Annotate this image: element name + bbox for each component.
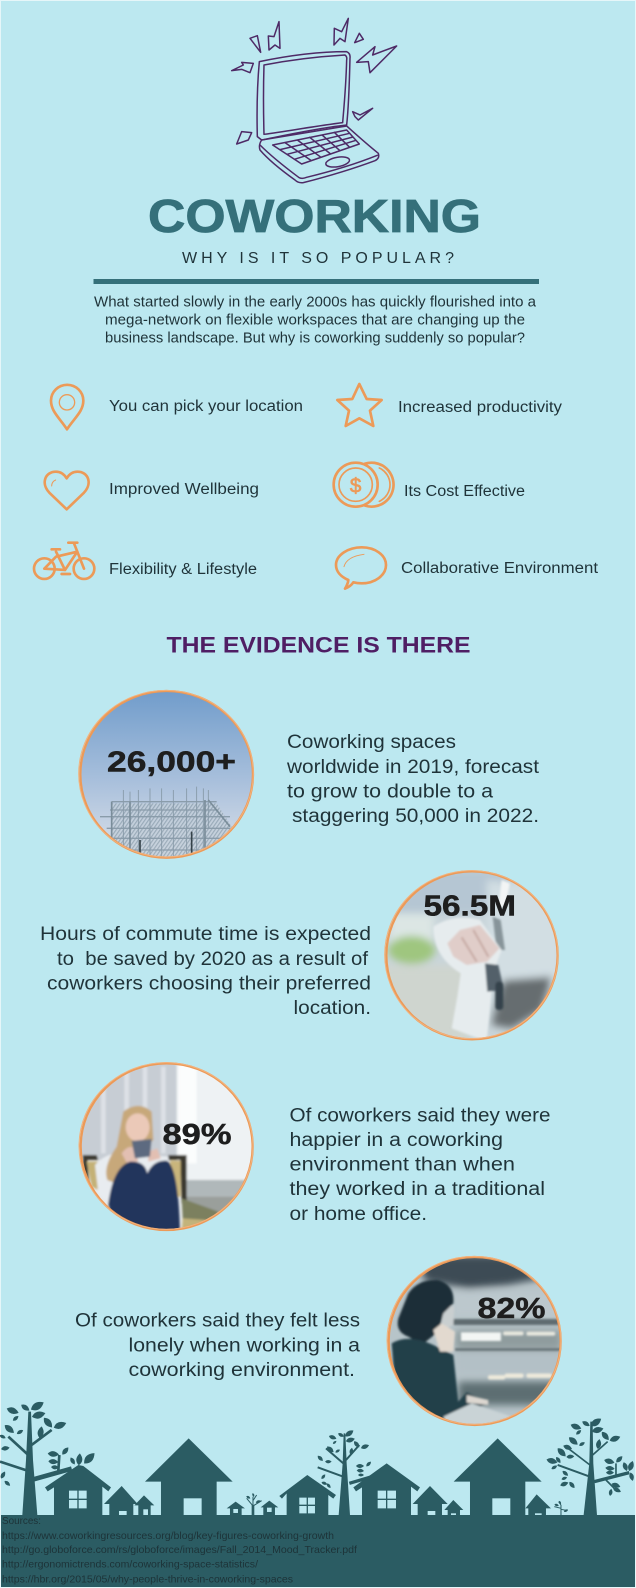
tree: large left (0, 1399, 97, 1515)
sources list: https://hbr.org/2015/05/why-people-thrive-in-coworking-spaces (2, 1574, 293, 1586)
description: coworkers choosing their preferred (47, 974, 371, 994)
heading: the evidence is there: THE EVIDENCE IS THERE (166, 632, 470, 658)
panel: stat 56.5M (40, 867, 563, 1045)
title: COWORKING (148, 190, 481, 242)
intro paragraph: What started slowly in the early 2000s has quickly flourished into a (94, 294, 537, 310)
description (286, 732, 540, 827)
tree: large right (546, 1416, 635, 1515)
icon: speech bubble (336, 547, 386, 589)
divider bar (94, 279, 539, 284)
house: roofed with window (353, 1463, 420, 1515)
sources list: http://go.globoforce.com/rs/globoforce/images/Fall_2014_Mood_Tracker.pdf (2, 1544, 357, 1556)
panel: stat 26,000+ (70, 685, 540, 862)
label: wellbeing: Improved Wellbeing (109, 481, 259, 498)
panel: stat 89% (77, 1060, 550, 1233)
photo: scaffolding against sky (70, 685, 257, 862)
illustration: neighbourhood skyline right (316, 1416, 635, 1515)
tree: medium centre (316, 1428, 374, 1515)
description: staggering 50,000 in 2022. (292, 806, 539, 827)
house: roofed with window (45, 1465, 111, 1515)
icon: coins: $ (350, 474, 362, 497)
description (40, 924, 371, 1019)
house: tiny pair with sapling (227, 1493, 278, 1515)
icon: star (337, 384, 382, 426)
tree: sapling (554, 1500, 569, 1515)
label: collaborative: Collaborative Environment (401, 560, 599, 577)
sources list: Sources: (2, 1515, 41, 1527)
intro paragraph: business landscape. But why is coworking suddenly so popular? (105, 330, 525, 346)
panel: reasons list (34, 384, 599, 589)
sources list (2, 1515, 357, 1586)
house: small pair (104, 1486, 154, 1515)
description: to grow to double to a (287, 782, 493, 802)
description (75, 1310, 360, 1381)
sources list: https://www.coworkingresources.org/blog/key-figures-coworking-growth (2, 1530, 334, 1542)
description: Hours of commute time is expected (40, 924, 371, 945)
icon: bicycle (34, 543, 94, 579)
description: coworking environment. (128, 1360, 355, 1381)
number: 56.5M (424, 890, 516, 922)
number: 82% (478, 1293, 546, 1325)
subtitle: WHY IS IT SO POPULAR? (182, 250, 454, 267)
description (290, 1106, 550, 1225)
label: productivity: Increased productivity (398, 399, 562, 416)
description: happier in a coworking (290, 1130, 503, 1151)
description: to be saved by 2020 as a result of (57, 949, 369, 970)
photo: woman with mug (77, 1060, 258, 1233)
photo: hand holding keys (383, 867, 563, 1045)
description: location. (294, 998, 371, 1019)
panel: stat 82% (75, 1255, 565, 1428)
photo: woman looking over city (385, 1255, 565, 1428)
house: small right (525, 1494, 551, 1515)
number: 26,000+ (107, 746, 236, 778)
description: lonely when working in a (128, 1336, 360, 1356)
label: location: You can pick your location (109, 398, 303, 415)
number: 89% (162, 1119, 232, 1151)
intro paragraph: mega-network on flexible workspaces that are changing up the (105, 312, 525, 328)
house: small pair (413, 1486, 463, 1515)
description: Of coworkers said they felt less (75, 1310, 360, 1332)
icon: location pin (51, 385, 83, 429)
description: or home office. (290, 1204, 427, 1225)
description: environment than when (290, 1154, 515, 1176)
icon: coins (334, 463, 394, 507)
description: they worked in a traditional (290, 1179, 545, 1200)
label: flexibility: Flexibility & Lifestyle (109, 561, 257, 578)
icon: heart (45, 472, 89, 509)
icon: laptop with lightning bolts (232, 18, 397, 183)
footer band (1, 1515, 635, 1587)
house: large with door (145, 1438, 233, 1515)
intro paragraph (94, 294, 537, 346)
description: worldwide in 2019, forecast (286, 757, 540, 778)
description: Coworking spaces (287, 732, 456, 753)
house: large with door (454, 1438, 542, 1515)
label: cost: Its Cost Effective (404, 483, 525, 500)
house: mid with window (279, 1475, 336, 1515)
illustration: neighbourhood skyline left (0, 1399, 336, 1515)
sources list: http://ergonomictrends.com/coworking-space-statistics/ (2, 1558, 258, 1570)
description: Of coworkers said they were (290, 1106, 550, 1126)
